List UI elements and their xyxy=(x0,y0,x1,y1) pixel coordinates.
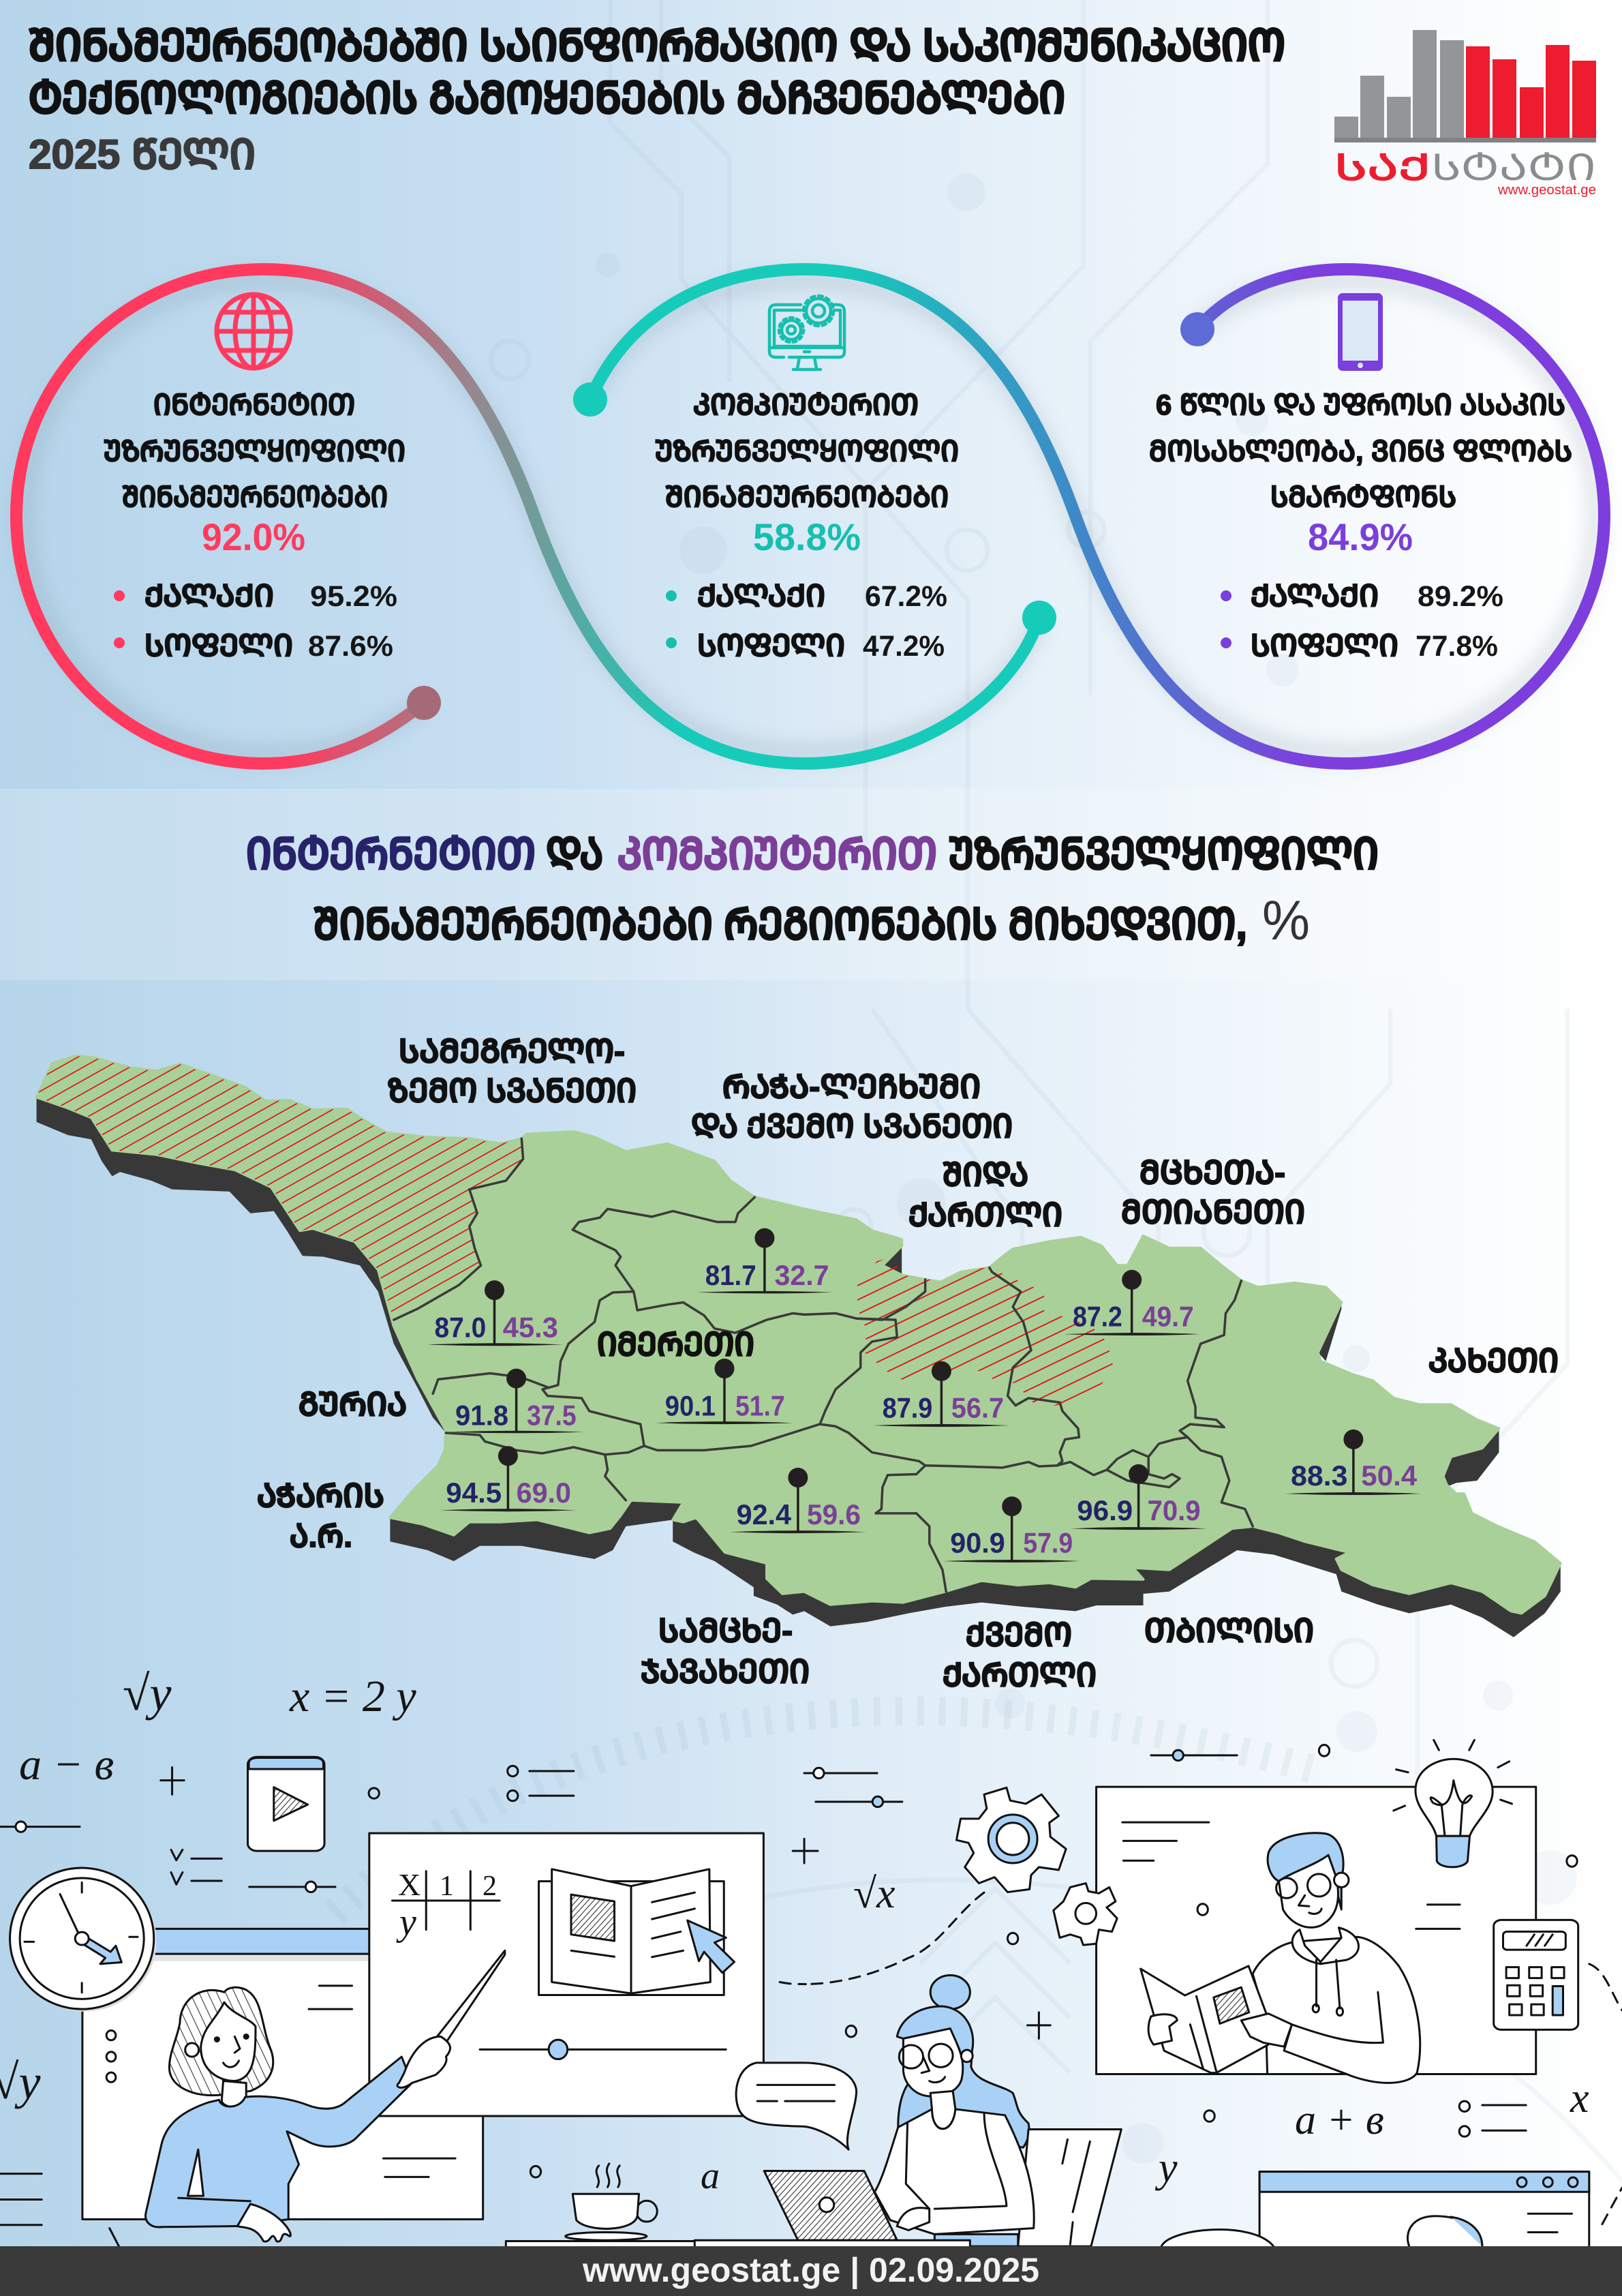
panel: smartphone: 6 ᲬᲚᲘᲡ ᲓᲐ ᲣᲤᲠᲝᲡᲘ ᲐᲡᲐᲙᲘᲡ xyxy=(1156,389,1565,421)
pin: Samegrelo-Zemo Svaneti xyxy=(427,1280,563,1346)
panel: computer: 47.2% xyxy=(863,630,945,663)
pin: Kvemo Kartli xyxy=(944,1496,1080,1562)
pin: Samtskhe-Javakheti: 59.6 xyxy=(807,1498,861,1530)
panel: smartphone: 77.8% xyxy=(1416,630,1498,663)
title: ᲢᲔᲥᲜᲝᲚᲝᲒᲘᲔᲑᲘᲡ ᲒᲐᲛᲝᲧᲔᲜᲔᲑᲘᲡ ᲛᲐᲩᲕᲔᲜᲔᲑᲚᲔᲑᲘ xyxy=(29,74,1065,122)
handwritten formulas: a xyxy=(701,2155,720,2197)
pin: Shida Kartli xyxy=(873,1361,1009,1427)
teacher xyxy=(146,1950,505,2241)
panel: internet xyxy=(104,294,406,663)
illustration left part xyxy=(0,1757,970,2253)
student man xyxy=(1141,1833,1420,2083)
icon: computer with gears xyxy=(769,296,844,369)
panel: internet: ᲣᲖᲠᲣᲜᲕᲔᲚᲧᲝᲤᲘᲚᲘ xyxy=(104,435,406,467)
logo: Geostat: www.geostat.ge xyxy=(1497,183,1596,198)
panel: smartphone: 89.2% xyxy=(1418,580,1503,613)
map extrusion shadow xyxy=(37,1097,1561,1637)
region labels: ᲡᲐᲛᲔᲒᲠᲔᲚᲝ- xyxy=(399,1033,625,1069)
student woman xyxy=(694,1975,1121,2252)
laptop xyxy=(764,2171,897,2240)
handwritten formulas: y xyxy=(1154,2145,1178,2191)
panel: internet: 92.0% xyxy=(202,515,305,558)
footer bar: www.geostat.ge | 02.09.2025 xyxy=(582,2251,1039,2290)
region labels xyxy=(257,1033,1559,1693)
pin: Imereti: 51.7 xyxy=(735,1389,785,1421)
pin: Kvemo Kartli: 90.9 xyxy=(950,1526,1005,1558)
panel: smartphone: ᲡᲛᲐᲠᲢᲤᲝᲜᲡ xyxy=(1270,481,1456,513)
region labels: ᲙᲐᲮᲔᲗᲘ xyxy=(1428,1342,1559,1378)
panel: smartphone: 84.9% xyxy=(1308,515,1413,558)
handwritten formulas: y xyxy=(396,1901,416,1944)
panel: computer: ᲥᲐᲚᲐᲥᲘ xyxy=(697,579,825,613)
gears and dashed path xyxy=(804,1787,1117,1984)
chart heading: ᲙᲝᲛᲞᲘᲣᲢᲔᲠᲘᲗ xyxy=(617,830,937,878)
region labels: ᲛᲪᲮᲔᲗᲐ- xyxy=(1139,1154,1285,1190)
pin: Racha-Lechkhumi: 32.7 xyxy=(774,1259,829,1291)
small decorations xyxy=(0,1766,818,2246)
panel: internet: 87.6% xyxy=(308,630,393,663)
panel: computer: ᲨᲘᲜᲐᲛᲔᲣᲠᲜᲔᲝᲑᲔᲑᲘ xyxy=(665,481,949,513)
pin: Kakheti: 50.4 xyxy=(1361,1460,1418,1492)
curve: red to teal xyxy=(16,269,1056,764)
left window panel xyxy=(82,1929,483,2220)
pin: Adjara xyxy=(440,1446,576,1511)
handwritten formulas: X xyxy=(398,1867,420,1902)
title: ᲨᲘᲜᲐᲛᲔᲣᲠᲜᲔᲝᲑᲔᲑᲨᲘ ᲡᲐᲘᲜᲤᲝᲠᲛᲐᲪᲘᲝ ᲓᲐ ᲡᲐᲙᲝᲛᲣᲜᲘᲙᲐᲪᲘᲝ xyxy=(29,22,1285,70)
pin: Samtskhe-Javakheti: 92.4 xyxy=(737,1498,792,1530)
clock xyxy=(10,1868,157,2012)
band behind chart heading xyxy=(0,789,1622,980)
pin: Adjara: 94.5 xyxy=(446,1477,502,1509)
region labels: ᲒᲣᲠᲘᲐ xyxy=(299,1386,407,1422)
region labels: ᲨᲘᲓᲐ xyxy=(943,1156,1028,1192)
handwritten formulas xyxy=(0,1666,1589,2197)
region labels: ᲓᲐ ᲥᲕᲔᲛᲝ ᲡᲕᲐᲜᲔᲗᲘ xyxy=(691,1108,1013,1144)
chart heading: ᲣᲖᲠᲣᲜᲕᲔᲚᲧᲝᲤᲘᲚᲘ xyxy=(949,830,1379,878)
pin: Kvemo Kartli: 57.9 xyxy=(1023,1526,1073,1558)
pin: Shida Kartli: 56.7 xyxy=(951,1392,1004,1423)
pin: Racha-Lechkhumi: 81.7 xyxy=(705,1259,756,1291)
panel: computer xyxy=(655,296,959,663)
map land surface xyxy=(37,1056,1561,1614)
chart heading xyxy=(246,830,1379,952)
pin: Samtskhe-Javakheti xyxy=(730,1468,866,1533)
footer bar xyxy=(0,2246,1622,2296)
icon: smartphone xyxy=(1338,293,1383,371)
panel: internet: ᲡᲝᲤᲔᲚᲘ xyxy=(144,629,293,663)
illustration: math and online learning xyxy=(0,1666,1622,2253)
curve: teal to purple xyxy=(573,269,1604,764)
panel: smartphone: ᲛᲝᲡᲐᲮᲚᲔᲝᲑᲐ, ᲕᲘᲜᲪ ᲤᲚᲝᲑᲡ xyxy=(1149,435,1572,467)
panel: computer: 67.2% xyxy=(865,580,947,613)
chart heading: ᲓᲐ xyxy=(546,830,603,878)
handwritten formulas: √y xyxy=(123,1666,172,1721)
handwritten formulas: 2 xyxy=(483,1871,497,1902)
region borders xyxy=(394,1138,1253,1592)
panel: internet: ᲨᲘᲜᲐᲛᲔᲣᲠᲜᲔᲝᲑᲔᲑᲘ xyxy=(122,481,388,513)
pin: Guria: 91.8 xyxy=(455,1399,508,1431)
handwritten formulas: x = 2 y xyxy=(289,1672,416,1721)
whiteboard with book xyxy=(369,1833,763,2116)
pin: Guria: 37.5 xyxy=(527,1399,577,1431)
panel: computer: ᲙᲝᲛᲞᲘᲣᲢᲔᲠᲘᲗ xyxy=(693,389,919,421)
hatched area: South Ossetia xyxy=(857,1257,1113,1409)
pin: Imereti: 90.1 xyxy=(665,1389,716,1421)
pin: Mtskheta-Mtianeti: 49.7 xyxy=(1142,1301,1194,1333)
pin: Samegrelo-Zemo Svaneti: 87.0 xyxy=(435,1312,486,1343)
chart heading: % xyxy=(1262,890,1310,952)
icon: globe xyxy=(217,294,290,368)
speech bubble xyxy=(736,2063,857,2149)
panel: computer: 58.8% xyxy=(753,515,861,558)
chart heading: ᲘᲜᲢᲔᲠᲜᲔᲢᲘᲗ xyxy=(246,830,536,878)
panel: smartphone: ᲥᲐᲚᲐᲥᲘ xyxy=(1251,579,1379,613)
handwritten formulas: √x xyxy=(853,1871,896,1917)
region labels: ᲥᲕᲔᲛᲝ xyxy=(966,1616,1072,1652)
illustration right part xyxy=(694,1740,1622,2252)
pin: Mtskheta-Mtianeti xyxy=(1064,1270,1200,1335)
second whiteboard xyxy=(1097,1787,1536,2074)
region labels: ᲠᲐᲭᲐ-ᲚᲔᲩᲮᲣᲛᲘ xyxy=(722,1068,981,1104)
coffee cup xyxy=(506,2164,970,2253)
pin: Mtskheta-Mtianeti: 87.2 xyxy=(1073,1301,1122,1333)
pin: Kakheti xyxy=(1285,1430,1422,1495)
panel: internet: ᲘᲜᲢᲔᲠᲜᲔᲢᲘᲗ xyxy=(153,389,355,421)
title: 2025 ᲬᲔᲚᲘ xyxy=(29,132,256,177)
pin: Kakheti: 88.3 xyxy=(1291,1460,1347,1492)
panel: internet: 95.2% xyxy=(310,580,397,613)
panel: internet: ᲥᲐᲚᲐᲥᲘ xyxy=(144,579,274,613)
pin: Shida Kartli: 87.9 xyxy=(883,1392,932,1423)
panel: smartphone: ᲡᲝᲤᲔᲚᲘ xyxy=(1251,629,1398,663)
region labels: ᲥᲐᲠᲗᲚᲘ xyxy=(943,1657,1097,1693)
video card xyxy=(248,1757,324,1851)
bottom window xyxy=(1161,2172,1589,2248)
handwritten formulas: a + в xyxy=(1295,2097,1384,2143)
region labels: ᲥᲐᲠᲗᲚᲘ xyxy=(908,1196,1062,1233)
logo: Geostat xyxy=(1334,30,1596,198)
pin: Imereti xyxy=(656,1359,793,1424)
S-curve soft shadows xyxy=(25,280,1596,755)
pin: Racha-Lechkhumi xyxy=(697,1228,833,1293)
handwritten formulas: a − в xyxy=(19,1740,114,1789)
region labels: ᲘᲛᲔᲠᲔᲗᲘ xyxy=(597,1326,754,1362)
map of Georgia xyxy=(37,1033,1561,1693)
region labels: ᲯᲐᲕᲐᲮᲔᲗᲘ xyxy=(641,1653,810,1689)
pin: Tbilisi xyxy=(1071,1464,1207,1530)
pin: Tbilisi: 70.9 xyxy=(1148,1494,1201,1526)
pin: Samegrelo-Zemo Svaneti: 45.3 xyxy=(503,1312,558,1343)
small decorations right xyxy=(804,1745,1622,2224)
pin: Adjara: 69.0 xyxy=(517,1477,571,1509)
panel: smartphone xyxy=(1149,293,1572,663)
logo: Geostat: ᲡᲢᲐᲢᲘ xyxy=(1431,147,1596,188)
region labels: ᲛᲗᲘᲐᲜᲔᲗᲘ xyxy=(1121,1194,1305,1230)
light bulb xyxy=(1394,1740,1512,1867)
title xyxy=(29,22,1285,177)
handwritten formulas: 1 xyxy=(440,1871,454,1902)
panel: computer: ᲣᲖᲠᲣᲜᲕᲔᲚᲧᲝᲤᲘᲚᲘ xyxy=(655,435,959,467)
region labels: Ა.Რ. xyxy=(290,1517,352,1554)
panel: computer: ᲡᲝᲤᲔᲚᲘ xyxy=(697,629,845,663)
chart heading: ᲨᲘᲜᲐᲛᲔᲣᲠᲜᲔᲝᲑᲔᲑᲘ ᲠᲔᲒᲘᲝᲜᲔᲑᲘᲡ ᲛᲘᲮᲔᲓᲕᲘᲗ, xyxy=(313,901,1247,948)
calculator xyxy=(1494,1920,1578,2029)
region labels: ᲗᲑᲘᲚᲘᲡᲘ xyxy=(1144,1612,1314,1648)
logo: Geostat: ᲡᲐᲥ xyxy=(1334,147,1430,188)
region labels: ᲐᲭᲐᲠᲘᲡ xyxy=(257,1477,384,1513)
pin: Guria xyxy=(448,1369,585,1433)
hatched area: Abkhazia xyxy=(37,1056,523,1320)
handwritten formulas: x xyxy=(1570,2075,1589,2121)
region labels: ᲖᲔᲛᲝ ᲡᲕᲐᲜᲔᲗᲘ xyxy=(388,1072,637,1108)
pin: Tbilisi: 96.9 xyxy=(1077,1494,1133,1526)
region labels: ᲡᲐᲛᲪᲮᲔ- xyxy=(658,1612,793,1648)
